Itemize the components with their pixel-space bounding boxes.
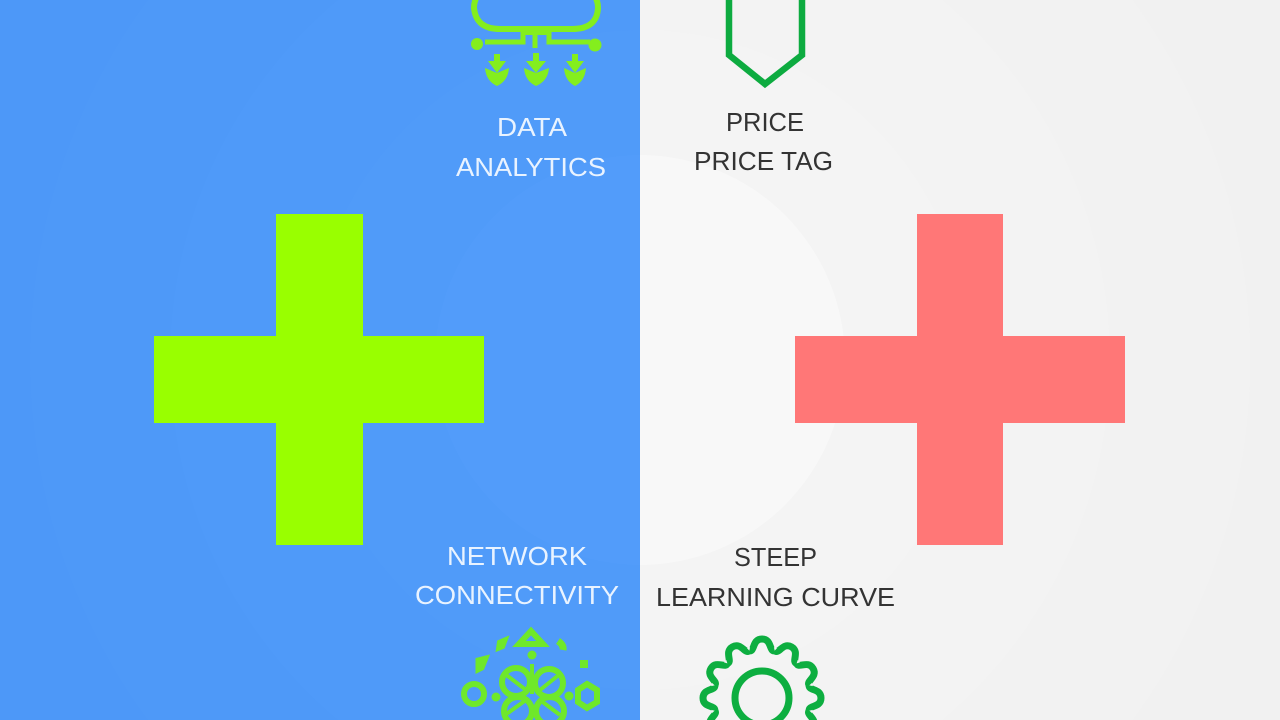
icon: price tag xyxy=(729,0,802,84)
heading: data analytics xyxy=(456,112,606,182)
heading: network connectivity xyxy=(415,541,619,610)
icon: green plus xyxy=(154,214,484,545)
heading: network connectivity: NETWORK xyxy=(447,541,588,571)
heading: network connectivity: CONNECTIVITY xyxy=(415,580,619,610)
heading: price tag xyxy=(694,107,833,176)
heading: steep learning curve: STEEP xyxy=(734,542,817,572)
heading: data analytics: DATA xyxy=(497,112,568,142)
heading: price tag: PRICE xyxy=(726,107,804,137)
icon: red plus xyxy=(795,214,1125,545)
heading: price tag: PRICE TAG xyxy=(694,146,833,176)
icon: cloud data analytics xyxy=(471,0,602,86)
heading: steep learning curve xyxy=(656,542,895,612)
heading: steep learning curve: LEARNING CURVE xyxy=(656,582,895,612)
icon: gear xyxy=(703,639,821,720)
icon: network brain xyxy=(464,631,597,720)
heading: data analytics: ANALYTICS xyxy=(456,152,606,182)
panel: pros (blue) xyxy=(0,0,640,720)
